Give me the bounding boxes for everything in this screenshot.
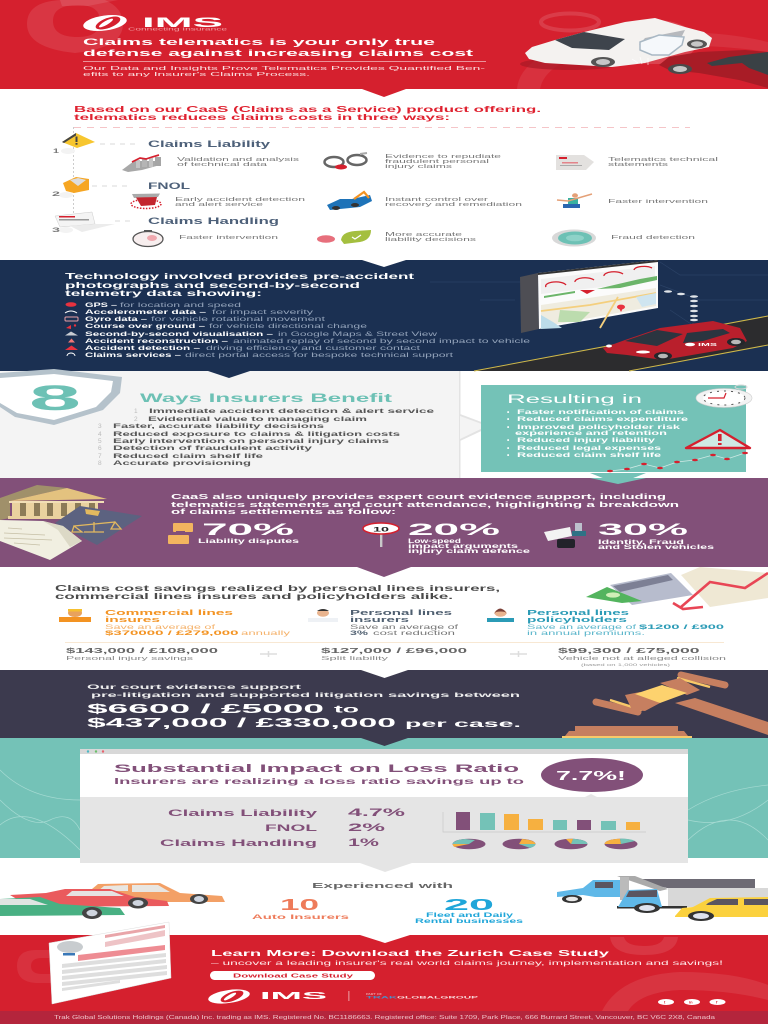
text: learn more — [211, 949, 723, 967]
logo: IMS: Connecting Insurance — [128, 26, 228, 32]
social icons: in — [689, 1000, 693, 1004]
column: personal insurers: insurers — [350, 615, 409, 624]
text: validation — [177, 157, 300, 168]
text: instant control: recovery and remediation — [385, 202, 522, 208]
list: telemetry data: Second-by-second visualisation – — [85, 332, 274, 338]
list: benefits: Evidential value to managing claim — [148, 416, 367, 423]
list: loss ratio breakdown: 2% — [348, 822, 385, 834]
column: personal policyholders: $1200 / £900 — [639, 625, 726, 631]
column: commercial lines: Commercial lines — [105, 608, 233, 617]
list: benefits: 8 — [98, 460, 102, 467]
list: results: • — [507, 409, 510, 416]
social icons: t — [664, 1000, 666, 1004]
column: commercial lines — [59, 608, 290, 637]
panel: three ways — [52, 104, 718, 246]
heading: loss ratio — [114, 763, 524, 786]
list: benefits — [98, 408, 435, 467]
button: download case study — [210, 971, 375, 980]
list: benefits: 2 — [134, 416, 138, 423]
column: personal insurers: cost reduction — [373, 631, 455, 637]
icon: accuracy tags — [317, 230, 371, 244]
icons: telemetry list — [65, 302, 78, 356]
list: telemetry data — [85, 303, 531, 359]
illustration: red IMS car — [603, 321, 747, 360]
panel: court litigation savings — [0, 670, 768, 738]
step 3: claims handling: 3 — [52, 227, 61, 234]
stat: personal injury savings: $143,000 / £108,000 — [66, 646, 218, 655]
illustration: courthouse, book, papers — [0, 485, 142, 560]
list: results: experience and retention — [515, 430, 667, 437]
text: technology heading: telemetry data showing: — [65, 289, 262, 298]
list: benefits: Accurate provisioning — [113, 460, 251, 467]
text: learn more: Learn More: Download the Zurich Case Study — [211, 949, 610, 958]
text: court support — [87, 684, 520, 699]
logo: Trak Global Group: PART OF — [366, 992, 382, 996]
plus — [260, 651, 277, 657]
illustration: red IMS car: IMS — [698, 342, 717, 347]
panel: 8 ways insurers benefit — [0, 369, 752, 484]
illustration: gavel — [562, 675, 768, 738]
list: results: Faster notification of claims — [517, 409, 685, 416]
text: court support: Our court evidence support — [87, 684, 303, 691]
title: defense against increasing claims cost — [83, 48, 473, 58]
text: evidence: fraudulent personal — [385, 159, 489, 165]
text: early detection: Early accident detection — [175, 197, 305, 203]
title — [83, 37, 473, 58]
list: benefits: 7 — [98, 453, 102, 460]
stat: 70%: 70% — [202, 520, 294, 539]
list: results: • — [507, 416, 510, 423]
panel: claims cost savings — [55, 567, 768, 667]
subtitle: Our Data and Insights Prove Telematics Provides Quantified Ben- — [83, 66, 485, 72]
list: loss ratio breakdown: Claims Liability — [168, 808, 319, 819]
list: telemetry data: animated replay of second by second impact to vehicle — [233, 339, 531, 345]
stat: vehicle not at collision — [558, 646, 726, 667]
icon: man — [557, 193, 592, 208]
list: telemetry data: Course over ground – — [85, 324, 206, 330]
list: telemetry data: for vehicle directional change — [209, 324, 368, 330]
list: results: Reduced claims expenditure — [517, 416, 689, 423]
step 2: FNOL: FNOL — [148, 181, 191, 191]
stat: 10 auto insurers: Auto Insurers — [252, 914, 350, 921]
subtitle: efits to any Insurer's Claims Process. — [83, 72, 311, 78]
panel: technology — [0, 260, 768, 371]
list: benefits: 6 — [98, 445, 102, 452]
icon: siren — [131, 194, 161, 208]
signal dots — [664, 290, 698, 326]
plus — [510, 651, 527, 657]
panel: court evidence breakdown — [0, 478, 768, 577]
logo: IMS — [82, 13, 228, 33]
list: benefits: Reduced claim shelf life — [113, 453, 264, 460]
stat: split liability: Split liability — [321, 656, 388, 662]
text: technology heading: photographs and second-by-second — [65, 281, 360, 290]
text: savings range — [87, 701, 522, 730]
column: personal policyholders: Personal lines — [527, 608, 629, 617]
text: technology heading: Technology involved provides pre-accident — [65, 272, 415, 281]
column: commercial lines: annually — [241, 631, 290, 637]
text: savings range: to — [334, 704, 359, 716]
text: evidence: injury claims — [385, 164, 453, 170]
heading: savings: Claims cost savings realized by personal lines insurers, — [55, 584, 500, 593]
panel: experience — [0, 876, 768, 925]
heading: loss ratio: Substantial Impact on Loss Ratio — [114, 763, 520, 775]
icon: handcuffs — [324, 153, 367, 170]
stat: 70%: Liability disputes — [198, 538, 300, 545]
text: validation: Validation and analysis — [177, 157, 300, 163]
text: experienced with: Experienced with — [312, 883, 453, 890]
bar chart — [443, 812, 646, 832]
list: results: • — [507, 437, 510, 444]
icon: warning triangle — [686, 430, 750, 448]
list: loss ratio breakdown: FNOL — [265, 823, 317, 834]
text: technical statements — [608, 157, 718, 168]
logo: Trak Global Group: GLOBALGROUP — [397, 994, 479, 1000]
stat: 30%: and Stolen vehicles — [598, 544, 715, 551]
list: telemetry data: for vehicle rotational movement — [151, 317, 326, 323]
column: personal policyholders — [487, 608, 726, 637]
heading: ways insurers benefit: Ways Insurers Benefit — [140, 393, 392, 405]
stat: 30%: Identity, Fraud — [598, 539, 684, 546]
icon: tow truck — [327, 192, 372, 210]
stat: 20%: impact arguments — [408, 543, 519, 550]
panel: learn more — [0, 922, 768, 1011]
text: accurate decisions: More accurate — [385, 232, 462, 238]
text: instant control — [385, 197, 522, 208]
text: court evidence intro: telematics statements and court attendance, highlighting a breakdown — [171, 502, 679, 509]
stat: personal injury savings — [66, 646, 218, 662]
stat: 20%: Low-speed — [408, 538, 461, 545]
stat: 20 fleet: Rental businesses — [415, 918, 524, 925]
button: download case study: Download Case Study — [233, 974, 355, 980]
text: court evidence intro: CaaS also uniquely provides expert court evidence support, including — [171, 494, 666, 501]
stat: 20 fleet: 20 — [444, 897, 494, 914]
list: loss ratio breakdown: 4.7% — [348, 807, 405, 819]
panel: loss ratio — [0, 738, 768, 872]
stat: vehicle not at collision: $99,300 / £75,000 — [558, 646, 700, 655]
step 1: claims liability: 1 — [53, 148, 60, 155]
icon: red car — [659, 50, 768, 88]
list: results: Improved policyholder risk — [517, 424, 681, 431]
text: court evidence intro: of claims settlements as follow: — [171, 509, 396, 516]
text: fraud detection: Fraud detection — [611, 235, 695, 241]
callout: 7.7% — [541, 758, 643, 792]
column: personal insurers: Save an average of — [350, 625, 459, 631]
logo: IMS footer — [207, 987, 327, 1006]
text: validation: of technical data — [177, 162, 267, 168]
logo: IMS footer: IMS — [260, 990, 327, 1002]
list: results: Reduced injury liability — [517, 437, 656, 444]
list: benefits: Immediate accident detection & alert service — [149, 408, 435, 415]
list: benefits: Reduced exposure to claims & litigation costs — [113, 431, 401, 438]
shield with 8: 8 — [29, 379, 81, 418]
list: telemetry data: GPS – — [85, 303, 118, 309]
list: results — [507, 409, 689, 459]
chart: red line — [607, 452, 748, 472]
footer: Trak Global Solutions Holdings (Canada) Inc. trading as IMS. Registered No. BC1186663. Registered office: Suite 1709, Park Place, 666 Burrard Street, Vancouver, BC V6C 2X8, Canada — [54, 1015, 715, 1021]
text: accurate decisions: liability decisions — [385, 237, 477, 243]
stat: personal injury savings: Personal injury savings — [66, 656, 193, 662]
list: results: • — [507, 452, 510, 459]
text: savings range: $6600 / £5000 — [87, 701, 324, 716]
road — [474, 316, 768, 371]
text: instant control: Instant control over — [385, 197, 488, 203]
list: telemetry data: Accident reconstruction – — [85, 339, 229, 345]
text: learn more: – uncover a leading insurer's real world claims journey, implementation and savings! — [211, 960, 723, 967]
column: personal policyholders: in annual premiums. — [527, 631, 646, 637]
list: telemetry data: Accident detection – — [85, 346, 201, 352]
text: evidence: Evidence to repudiate — [385, 154, 501, 160]
social icons — [658, 999, 726, 1005]
list: benefits: Early intervention on personal injury claims — [113, 438, 390, 445]
stat: 20% — [363, 520, 531, 555]
stat: 30%: 30% — [598, 520, 688, 539]
icon: document — [556, 155, 594, 170]
title: Claims telematics is your only true — [83, 37, 435, 47]
list: telemetry data: Claims services – — [85, 353, 182, 359]
column: commercial lines: Save an average of — [105, 625, 216, 631]
step 3: claims handling — [52, 212, 279, 234]
illustration: calculator, cash, bill — [586, 567, 768, 609]
list: loss ratio breakdown — [160, 807, 405, 849]
list: telemetry data: for location and speed — [120, 303, 241, 309]
text: faster intervention: Faster intervention — [608, 199, 708, 205]
heading: savings: commercial lines insures and policyholders alike. — [55, 592, 453, 601]
stat: split liability — [321, 646, 467, 662]
footer — [0, 1011, 768, 1024]
text: technical statements: Telematics technical — [608, 157, 718, 163]
stat: 70% — [168, 520, 300, 545]
step 2: FNOL — [52, 177, 191, 198]
list: telemetry data: for impact severity — [212, 310, 313, 316]
panel: header — [0, 0, 768, 97]
heading: three ways — [74, 104, 541, 122]
icon: chart — [122, 155, 161, 172]
heading: three ways: Based on our CaaS (Claims as a Service) product offering. — [74, 104, 541, 114]
pie charts — [452, 839, 638, 849]
column: commercial lines: insures — [105, 615, 160, 624]
text: early detection: and alert service — [175, 202, 263, 208]
heading: three ways: telematics reduces claims costs in three ways: — [74, 112, 450, 122]
shield with 8 — [0, 369, 122, 425]
list: telemetry data: driving efficiency and customer contact — [206, 346, 421, 352]
icon: radar — [552, 230, 596, 246]
list: benefits: 4 — [98, 431, 102, 438]
logo: IMS: IMS — [142, 14, 223, 30]
text: savings range: per case. — [405, 719, 522, 730]
heading: savings — [55, 584, 500, 601]
stat: 30% — [544, 520, 715, 551]
step 1: claims liability: Claims Liability — [148, 139, 270, 149]
stat: 20 fleet: Fleet and Daily — [426, 912, 514, 919]
list: benefits: Detection of fraudulent activity — [113, 445, 313, 452]
stat: 20%: injury claim defence — [408, 548, 531, 555]
list: results: Reduced claim shelf life — [517, 452, 662, 459]
illustration: trucks — [557, 876, 768, 921]
column: personal insurers: Personal lines — [350, 608, 452, 617]
list: results: • — [507, 424, 510, 431]
text: technology heading — [65, 272, 415, 298]
list: results: • — [507, 445, 510, 452]
icon: stopwatch — [133, 230, 163, 246]
list: results: Reduced legal expenses — [517, 445, 662, 452]
illustration: case study document — [49, 922, 171, 1004]
stat: split liability: $127,000 / £96,000 — [321, 646, 467, 655]
icon: stopwatch — [696, 385, 752, 408]
text: accurate decisions — [385, 232, 477, 243]
stat: 20%: 10 — [373, 526, 390, 534]
stat: 10 auto insurers: 10 — [280, 897, 319, 914]
text: savings range: $437,000 / £330,000 — [87, 715, 396, 730]
list: benefits: 5 — [98, 438, 102, 445]
heading: loss ratio: Insurers are realizing a loss ratio savings up to — [114, 777, 524, 786]
step 2: FNOL: 2 — [52, 191, 61, 198]
column: personal policyholders: Save an average of — [527, 625, 637, 631]
illustration: dashboard — [520, 260, 658, 333]
social icons: f — [716, 1000, 718, 1004]
step 1: claims liability — [53, 133, 270, 155]
list: telemetry data: direct portal access for bespoke technical support — [185, 353, 454, 359]
step 3: claims handling: Claims Handling — [148, 216, 279, 226]
stat: vehicle not at collision: Vehicle not at alleged collision — [558, 656, 726, 662]
list: loss ratio breakdown: 1% — [348, 837, 379, 849]
stat: 20 fleet — [415, 897, 524, 925]
panel: resulting in — [481, 385, 752, 484]
text: court support: pre-litigation and supported litigation savings between — [91, 692, 520, 699]
list: telemetry data: in Google Maps & Street View — [278, 332, 438, 338]
text: technical statements: statements — [608, 162, 669, 168]
logo: Trak Global Group: TRAK — [366, 994, 397, 1000]
stat: 20%: 20% — [408, 520, 500, 539]
list: telemetry data: Gyro data – — [85, 317, 148, 323]
subtitle — [83, 66, 485, 78]
text: court evidence intro — [171, 494, 679, 516]
list: benefits: 3 — [98, 423, 102, 430]
list: loss ratio breakdown: Claims Handling — [160, 838, 317, 849]
stat: 10 auto insurers — [252, 897, 350, 921]
column: personal insurers — [308, 608, 459, 637]
list: benefits: 1 — [134, 408, 138, 415]
column: commercial lines: $370000 / £279,000 — [105, 631, 240, 637]
text: evidence — [385, 154, 501, 170]
icon: white car with shield — [520, 18, 712, 70]
text: faster intervention: Faster intervention — [179, 235, 278, 241]
text: early detection — [175, 197, 305, 208]
column: personal insurers: 3% — [350, 631, 369, 637]
logo: Trak Global Group — [366, 992, 479, 1000]
callout: 7.7%: 7.7%! — [556, 768, 626, 783]
column: personal policyholders: policyholders — [527, 615, 627, 624]
illustration: cars — [0, 883, 225, 919]
list: benefits: Faster, accurate liability decisions — [113, 423, 325, 430]
stat: vehicle not at collision: (based on 1,000 vehicles) — [581, 663, 670, 667]
list: telemetry data: Accelerometer data – — [85, 310, 207, 316]
panel: resulting in: Resulting in — [507, 394, 642, 406]
